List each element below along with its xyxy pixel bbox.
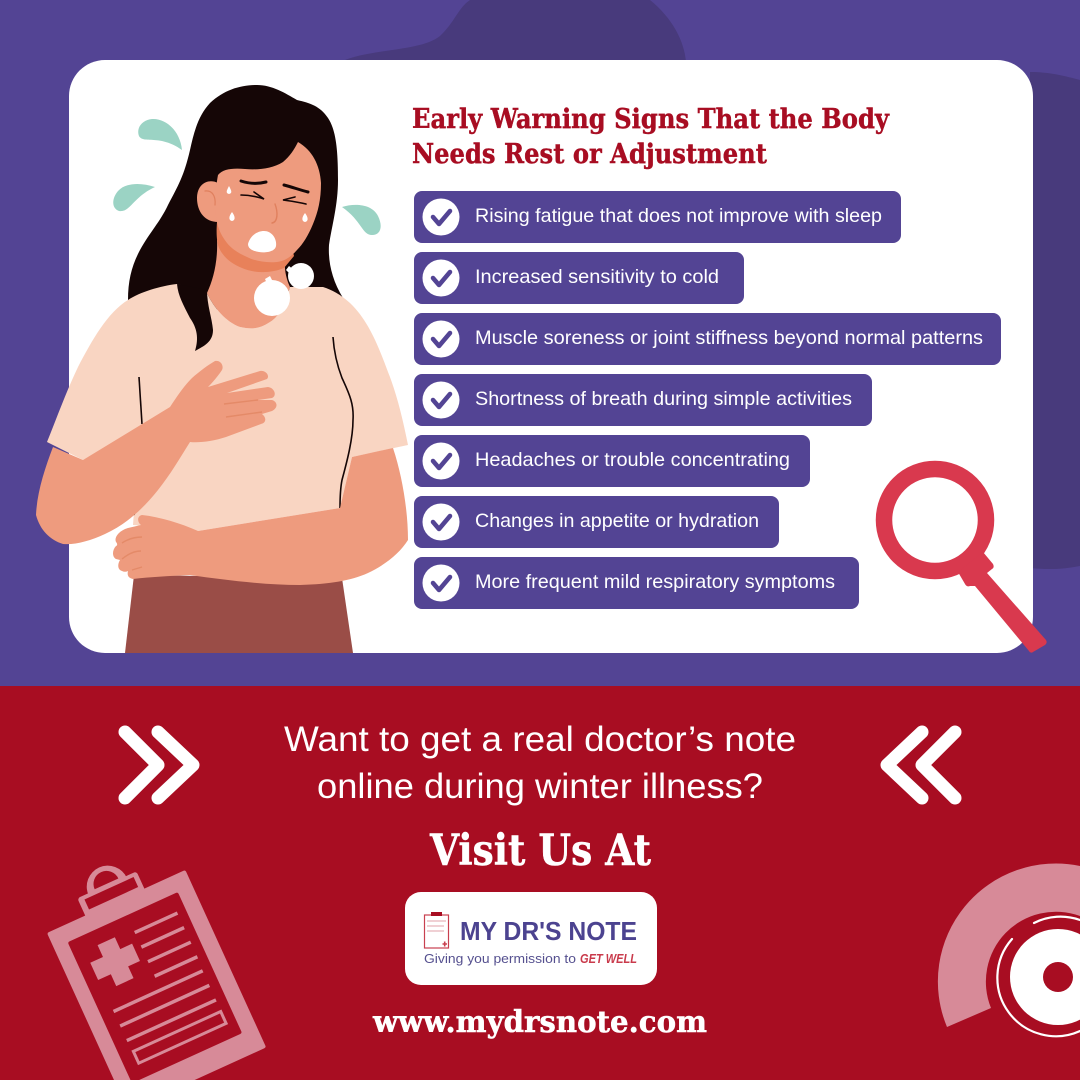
icon: chevrons right	[125, 732, 193, 798]
logo tagline accent: GET WELL	[580, 952, 637, 966]
shirt	[47, 284, 408, 531]
face	[216, 142, 321, 262]
list item 2: Increased sensitivity to cold	[475, 266, 719, 288]
upper arm and hand	[36, 361, 276, 544]
list item 7: More frequent mild respiratory symptoms	[475, 571, 835, 593]
icon: gauge dial	[938, 864, 1080, 1036]
icon: sweat drop 2	[113, 184, 155, 211]
icon: chevrons left	[887, 732, 955, 798]
website url: www.mydrsnote.com	[372, 1005, 707, 1040]
mouth	[248, 231, 276, 252]
icon: sweat drop 1	[138, 119, 182, 150]
panel: red call to action	[0, 686, 1080, 1080]
logo tagline: Giving you permission to	[424, 951, 576, 966]
panel: white card	[69, 60, 1033, 653]
icon: magnifying glass	[884, 469, 1047, 653]
cough puffs	[254, 263, 314, 316]
logo card	[405, 892, 657, 985]
neck	[207, 240, 290, 328]
heading: Early Warning Signs That the Body	[412, 103, 890, 135]
tears	[227, 186, 308, 222]
background blob: top	[340, 0, 686, 62]
body lines	[134, 337, 353, 515]
skirt	[125, 575, 353, 653]
call to action question: online during winter illness?	[317, 767, 763, 806]
illustration: woman coughing	[36, 85, 408, 653]
neck shadow	[217, 222, 294, 272]
heading	[412, 103, 890, 170]
list item 4	[414, 374, 872, 426]
ear	[197, 181, 218, 222]
list item 4: Shortness of breath during simple activities	[475, 388, 852, 410]
list item 2	[414, 252, 744, 304]
list item 7	[414, 557, 859, 609]
hair back	[128, 85, 343, 320]
hand lines	[224, 400, 262, 417]
lower arm and hand	[113, 448, 408, 585]
call to action question	[284, 720, 796, 806]
logo icon: clipboard	[424, 912, 448, 948]
face features	[205, 181, 308, 223]
call to action question: Want to get a real doctor’s note	[284, 720, 796, 759]
list item 1: Rising fatigue that does not improve with sleep	[475, 205, 882, 227]
list item 3	[414, 313, 1001, 365]
list item 1	[414, 191, 901, 243]
heading: Needs Rest or Adjustment	[412, 138, 767, 170]
icon: sweat drop 3	[342, 205, 381, 235]
visit us heading: Visit Us At	[429, 826, 651, 876]
list item 6	[414, 496, 779, 548]
background blob: right	[1030, 72, 1080, 569]
hair front lock	[177, 284, 213, 351]
list item 5	[414, 435, 810, 487]
icon: medical clipboard	[31, 835, 266, 1080]
lower hand lines	[122, 537, 142, 570]
list item 3: Muscle soreness or joint stiffness beyond normal patterns	[475, 327, 983, 349]
logo wordmark: MY DR'S NOTE	[460, 916, 637, 946]
list item 6: Changes in appetite or hydration	[475, 510, 759, 532]
list item 5: Headaches or trouble concentrating	[475, 449, 790, 471]
